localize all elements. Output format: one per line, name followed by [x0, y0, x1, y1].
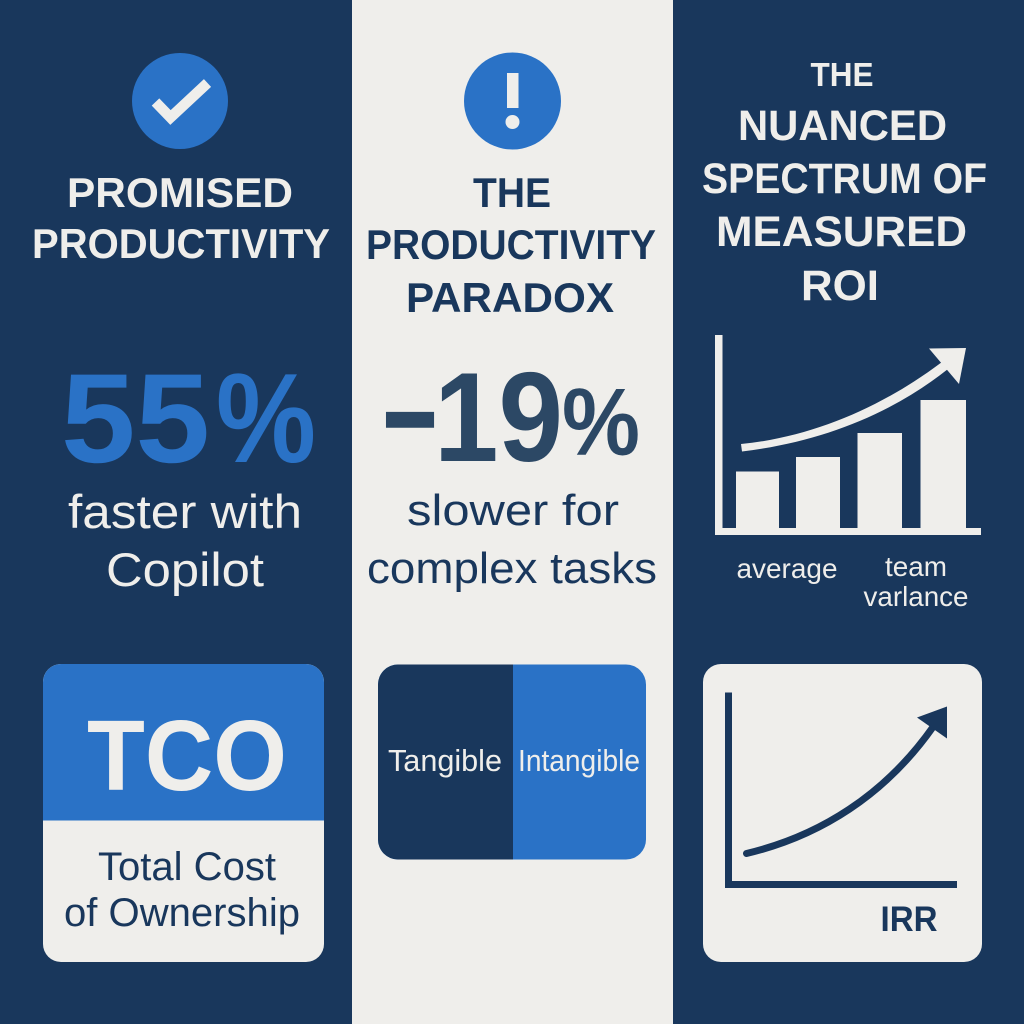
icon: check mark	[132, 53, 228, 149]
stat: -19%: %	[562, 369, 640, 476]
card: tangible and intangible: Intangible	[518, 743, 640, 778]
card: TCO: of Ownership	[64, 891, 300, 935]
label: average: average	[736, 553, 838, 584]
heading: the nuanced spectrum of measured roi: SPECTRUM OF	[702, 155, 987, 203]
text: faster with copilot: faster with	[68, 485, 302, 538]
heading: the nuanced spectrum of measured roi: NUANCED	[738, 102, 947, 150]
stat: 55%: %	[216, 347, 316, 489]
heading: the nuanced spectrum of measured roi	[702, 56, 987, 310]
stat: -19%	[382, 337, 640, 499]
label: team varlance	[864, 551, 968, 612]
heading: promised productivity	[32, 169, 330, 267]
text: faster with copilot: Copilot	[106, 543, 264, 596]
heading: the nuanced spectrum of measured roi: THE	[810, 56, 874, 93]
card: tangible and intangible: Tangible	[388, 743, 502, 778]
card: tangible and intangible	[378, 664, 646, 860]
stat: -19%: 19	[434, 346, 563, 488]
card: TCO: TCO	[87, 700, 287, 812]
card: TCO: Total Cost	[98, 845, 276, 889]
chart: bars with rising arrow	[715, 335, 981, 535]
heading: the nuanced spectrum of measured roi: ROI	[801, 262, 879, 310]
panel: nuanced spectrum	[673, 0, 1024, 1024]
panel: promised productivity	[0, 0, 352, 1024]
icon: exclamation mark	[464, 52, 561, 150]
heading: the nuanced spectrum of measured roi: MEASURED	[716, 208, 967, 256]
stat: 55%	[61, 347, 316, 489]
card: IRR chart: IRR	[880, 900, 938, 939]
heading: promised productivity: PRODUCTIVITY	[32, 220, 330, 267]
heading: promised productivity: PROMISED	[67, 169, 293, 216]
card: IRR chart	[703, 664, 982, 962]
heading: the productivity paradox	[366, 169, 656, 321]
heading: the productivity paradox: PRODUCTIVITY	[366, 221, 656, 268]
text: faster with copilot	[68, 485, 302, 596]
heading: the productivity paradox: PARADOX	[406, 274, 614, 321]
panel: productivity paradox	[352, 0, 673, 1024]
label: team varlance: team	[885, 551, 947, 582]
stat: -19%: −	[382, 337, 438, 499]
text: slower for complex tasks: complex tasks	[367, 544, 657, 593]
stat: 55%: 55	[61, 347, 210, 489]
text: slower for complex tasks: slower for	[407, 486, 619, 535]
label: team varlance: varlance	[864, 581, 968, 612]
heading: the productivity paradox: THE	[473, 169, 551, 216]
text: slower for complex tasks	[367, 486, 657, 593]
card: TCO	[43, 664, 324, 962]
